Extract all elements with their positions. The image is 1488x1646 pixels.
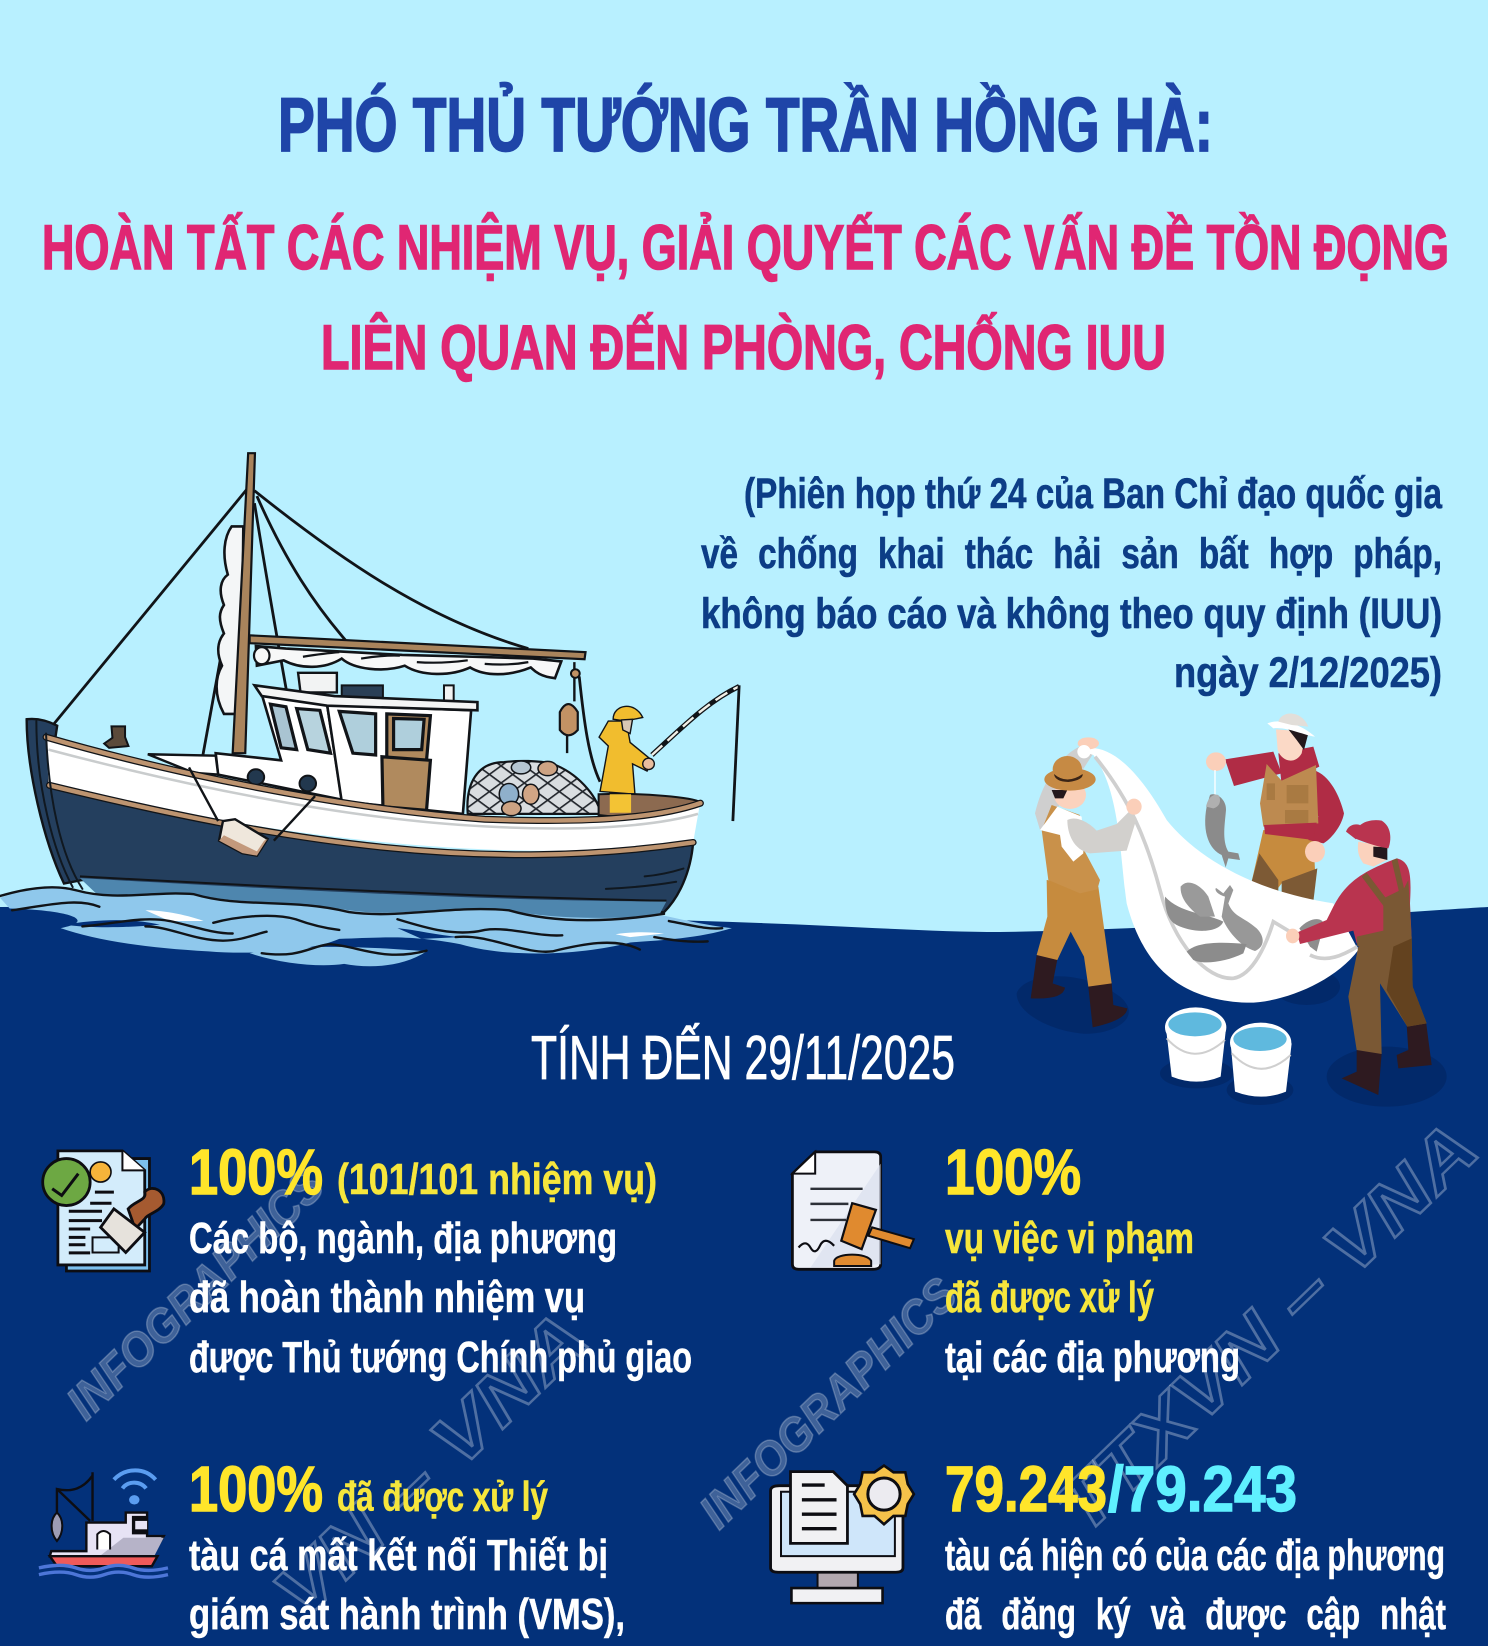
hull white band: [46, 735, 700, 851]
boom: [250, 635, 586, 659]
man in white hat: [1205, 713, 1344, 902]
stat block: 79.243 registered vessels: [945, 1453, 1446, 1639]
waves: [0, 887, 732, 966]
hull trims: [36, 721, 700, 889]
stat block: 100% violations: [945, 1136, 1240, 1382]
white net: [1078, 748, 1358, 1003]
sea background: [0, 907, 1488, 1646]
bucket right: [1230, 1023, 1292, 1097]
stat block: 79.243 registered vessels: 79.243: [945, 1453, 1107, 1525]
cabin: [216, 694, 342, 800]
man in brown hat: [1031, 737, 1142, 1027]
watermark: [57, 1108, 1488, 1634]
fish in the net: [1165, 883, 1324, 962]
stat block: 100% tasks: [189, 1136, 692, 1382]
fisherman in yellow: [599, 706, 654, 813]
aft deck interior: [599, 794, 700, 816]
illustration: three fishermen with net: [1017, 713, 1447, 1107]
stat block: 100% violations: 100%: [945, 1136, 1081, 1208]
stat block: 100% tasks: đã hoàn thành nhiệm vụ: [189, 1273, 585, 1322]
furled sail on mast: [217, 526, 243, 714]
fisherman legs in front of deck: [610, 794, 631, 813]
cabin windows: [270, 704, 430, 810]
stat block: 79.243 registered vessels: /79.243: [1108, 1453, 1297, 1525]
bow post fitting: [104, 726, 128, 748]
stat block: 100% VMS: tàu cá mất kết nối Thiết bị: [189, 1531, 608, 1580]
meeting note text block: ngày 2/12/2025): [1174, 649, 1442, 697]
heading line 2: LIÊN QUAN ĐẾN PHÒNG, CHỐNG IUU: [321, 312, 1166, 383]
hull waterline: [80, 878, 666, 930]
icon: boat with wifi signal: [39, 1470, 168, 1577]
stat block: 100% violations: tại các địa phương: [945, 1333, 1240, 1382]
hull dark paint: [27, 719, 693, 912]
icon: document with stamp: [43, 1151, 164, 1271]
held fish: [1213, 770, 1217, 795]
bucket left: [1165, 1007, 1226, 1082]
hanging buoy: [560, 662, 580, 753]
net rope edge: [1095, 757, 1357, 978]
date heading: TÍNH ĐẾN 29/11/2025: [531, 1024, 955, 1093]
watermark: TTXVN – VNA: [1041, 1108, 1488, 1549]
rigging ropes: [53, 489, 600, 782]
watermark: INFOGRAPHICS: [57, 1159, 335, 1430]
watermark: INFOGRAPHICS: [690, 1268, 968, 1539]
stat block: 100% violations: vụ việc vi phạm: [945, 1214, 1194, 1263]
illustration: fishing boat: [0, 453, 739, 966]
fore deck: [148, 754, 218, 775]
icon: document with gavel: [792, 1152, 914, 1269]
stat block: 100% tasks: 100%: [189, 1136, 323, 1208]
cabin roof: [254, 685, 477, 710]
cabin radar and equipment: [298, 673, 337, 692]
mast: [233, 453, 255, 753]
meeting note text block: [701, 470, 1443, 697]
wave lines: [0, 887, 722, 955]
stat block: 100% VMS: 100%: [189, 1453, 323, 1525]
rolled sail under boom: [254, 646, 561, 678]
stat block: 100% VMS: [189, 1453, 625, 1639]
fishing rod and line: [652, 685, 739, 821]
icon: monitor with document and gear: [771, 1466, 914, 1603]
stat block: 100% tasks: được Thủ tướng Chính phủ giao: [189, 1333, 692, 1382]
fender: [189, 767, 315, 856]
stat block: 100% tasks: (101/101 nhiệm vụ): [337, 1155, 657, 1204]
grey net flap behind man: [1035, 743, 1093, 830]
stat block: 100% violations: đã được xử lý: [945, 1273, 1154, 1322]
stat block: 100% tasks: Các bộ, ngành, địa phương: [189, 1214, 617, 1263]
stat block: 100% VMS: giám sát hành trình (VMS),: [189, 1590, 625, 1639]
stat block: 100% VMS: đã được xử lý: [337, 1473, 548, 1520]
man in red cap: [1286, 820, 1432, 1095]
fishing nets pile: [467, 761, 601, 814]
ground shadows: [1017, 968, 1447, 1107]
watermark: VN – VNA: [259, 1297, 603, 1634]
portholes: [248, 769, 264, 785]
